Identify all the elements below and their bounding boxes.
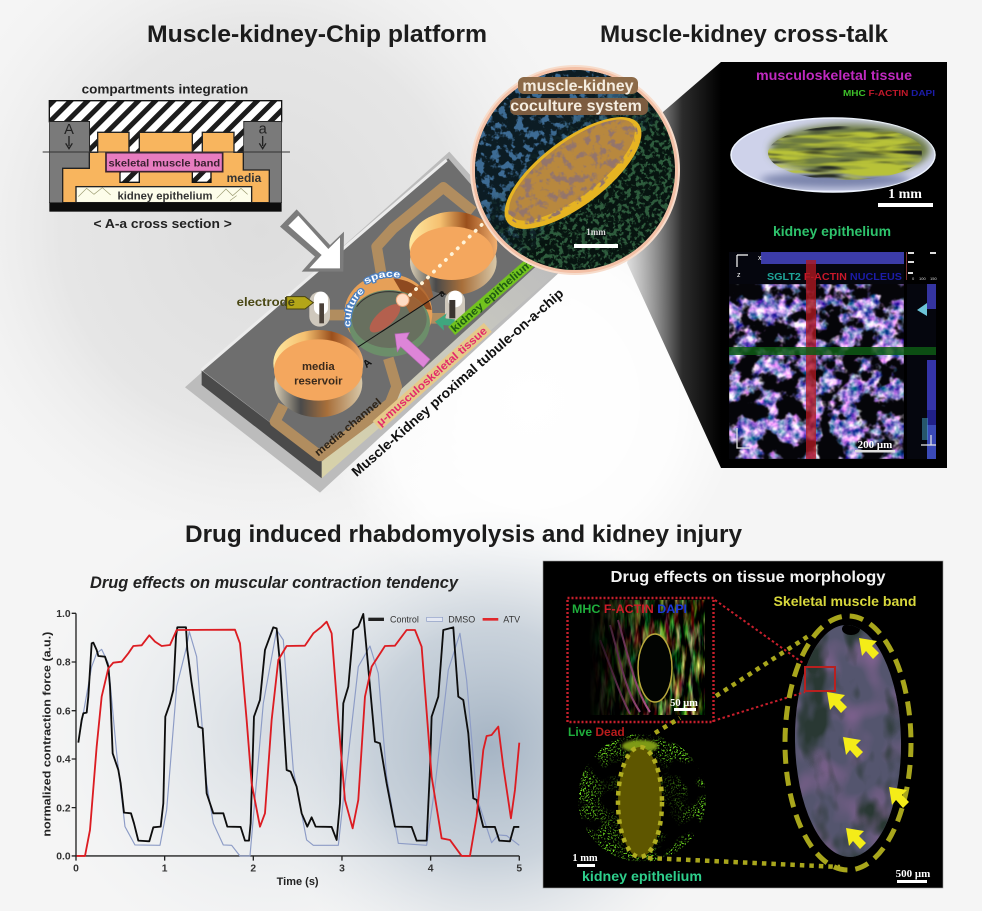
caption: A-a cross section: < A-a cross section >	[93, 217, 232, 231]
small calibration marks: 0	[912, 276, 915, 281]
culture space label: culture	[344, 288, 365, 328]
inset scale bar: 50 μm	[670, 698, 698, 709]
chart legend: DMSO	[448, 614, 475, 624]
scale bar 1 mm	[878, 187, 933, 207]
muscle band image	[731, 118, 935, 192]
scale bar 1 mm: 1 mm	[888, 187, 922, 202]
yellow arrows	[827, 638, 909, 849]
gray side walls	[49, 122, 282, 203]
skeletal muscle band: skeletal muscle band	[108, 158, 220, 169]
y axis title: normalized contraction force (a.u.)	[42, 631, 54, 837]
stain legend: MHC F-ACTIN DAPI	[843, 89, 935, 98]
y tick labels: 0.8	[56, 658, 71, 669]
electrode left	[309, 292, 330, 327]
top orthogonal strip	[729, 252, 904, 284]
top orthogonal strip: z	[737, 272, 741, 279]
red zoom indicators	[568, 598, 835, 722]
series: Control	[78, 614, 519, 841]
panel: musculoskeletal and kidney imaging	[721, 62, 947, 468]
inset micrograph	[589, 600, 705, 715]
chart legend: Control	[390, 614, 419, 624]
label: kidney epithelium: kidney epithelium	[449, 258, 535, 335]
y tick labels	[56, 609, 71, 863]
label: media reservoir: reservoir	[294, 376, 343, 388]
heading: compartments integration: compartments integration	[82, 81, 248, 96]
lower hatched posts	[120, 172, 211, 182]
x tick labels	[73, 863, 522, 874]
label: Muscle-Kidney proximal tubule-on-a-chip: Muscle-Kidney proximal tubule-on-a-chip	[349, 286, 566, 480]
small calibration marks: 150	[930, 276, 937, 281]
skeletal muscle band	[106, 153, 223, 172]
coculture label: muscle-kidney	[522, 78, 634, 95]
horizontal green section band	[729, 347, 936, 355]
live dead legend: Live Dead	[568, 725, 625, 739]
axes	[72, 613, 519, 861]
heading: Drug effects on tissue morphology: Drug effects on tissue morphology	[610, 569, 886, 586]
scale bar 500 μm: 500 μm	[896, 868, 930, 880]
chart legend	[368, 614, 520, 624]
zoom cone shadow	[627, 62, 721, 468]
heading: musculoskeletal tissue: musculoskeletal tissue	[756, 67, 912, 83]
scale bar 1 mm: 1 mm	[572, 853, 598, 864]
title: Muscle-kidney cross-talk: Muscle-kidney cross-talk	[600, 21, 889, 48]
overlay: kidney coculture footprint	[618, 747, 662, 857]
hatched upper compartment	[49, 101, 282, 152]
right media reservoir	[409, 212, 497, 295]
kidney stain legend: SGLT2 F-ACTIN NUCLEUS	[767, 272, 902, 283]
label: media: media	[227, 171, 262, 185]
marker A on chip: A	[361, 356, 375, 371]
electrode callout: electrode	[237, 295, 295, 309]
panel: tissue morphology	[543, 561, 943, 888]
x tick labels: 5	[516, 863, 522, 874]
y tick labels: 0.2	[56, 803, 71, 814]
title: Muscle-kidney-Chip platform: Muscle-kidney-Chip platform	[147, 21, 487, 48]
section marker a: a	[259, 121, 268, 137]
heading: kidney epithelium: kidney epithelium	[773, 223, 891, 239]
label: kidney epithelium: kidney epithelium	[582, 868, 702, 884]
y tick labels: 0.6	[56, 706, 71, 717]
electrode right	[445, 291, 465, 324]
scale bar 200 μm: 200 μm	[858, 439, 892, 451]
label: media channel: media channel	[313, 396, 384, 459]
large white arrow	[280, 209, 344, 272]
muscle tissue petal	[365, 299, 405, 337]
x tick labels: 0	[73, 863, 79, 874]
culture space label	[344, 270, 402, 328]
culture space label: space	[363, 270, 402, 285]
top orthogonal strip: x	[758, 255, 762, 262]
arrow: muscle tissue	[395, 333, 430, 367]
kidney epithelium layer: kidney epithelium	[117, 191, 212, 203]
coculture label	[510, 77, 648, 115]
media channel tubes	[275, 187, 473, 456]
panel: muscle-kidney coculture circle	[470, 65, 680, 275]
small calibration marks	[906, 252, 937, 281]
kidney confocal image	[729, 284, 904, 459]
dashed outline of muscle band	[785, 616, 911, 870]
x axis title: Time (s)	[277, 876, 319, 888]
y tick labels: 0.0	[56, 852, 71, 863]
x tick labels: 3	[339, 863, 345, 874]
vertical red section band	[806, 260, 816, 459]
electrode callout	[237, 295, 313, 309]
chart subtitle: Drug effects on muscular contraction tendency	[90, 574, 459, 592]
label: media reservoir: media	[302, 361, 335, 373]
left media reservoir	[273, 330, 363, 417]
scale bar 1mm: 1mm	[586, 227, 606, 237]
x tick labels: 4	[428, 863, 434, 874]
muscle band fluorescence image	[795, 625, 901, 857]
section marker A	[64, 122, 74, 149]
panel: chip illustration	[185, 152, 566, 492]
inset stain legend: MHC F-ACTIN DAPI	[572, 602, 687, 616]
small calibration marks: 100	[919, 276, 926, 281]
marker a on chip: a	[437, 288, 448, 300]
title: Drug induced rhabdomyolysis and kidney injury: Drug induced rhabdomyolysis and kidney injury	[185, 521, 743, 548]
dotted light path from culture to zoom circle	[403, 222, 485, 313]
A-a section line	[348, 292, 443, 353]
section marker A: A	[64, 122, 74, 138]
series: DMSO	[78, 630, 519, 856]
culture space	[344, 270, 432, 356]
y tick labels: 0.4	[56, 755, 71, 766]
x tick labels: 2	[250, 863, 256, 874]
label: micro musculoskeletal tissue: μ-musculoskeletal tissue	[374, 325, 490, 429]
x tick labels: 1	[162, 863, 168, 874]
tissue in coculture	[504, 117, 642, 229]
chip base plate	[185, 152, 558, 493]
kidney epithelium layer	[76, 187, 252, 203]
kidney live/dead image	[578, 734, 706, 862]
axis marks	[737, 428, 936, 448]
chart legend: ATV	[503, 614, 520, 624]
y tick labels: 1.0	[56, 609, 71, 620]
coculture label: coculture system	[510, 98, 642, 115]
scale bar 1mm	[574, 227, 618, 248]
orange media chamber	[63, 132, 269, 203]
right orthogonal strip	[907, 284, 936, 459]
series: ATV	[77, 622, 519, 856]
heading: Skeletal muscle band: Skeletal muscle band	[774, 593, 916, 609]
focus point	[396, 294, 409, 306]
panel: A-a cross section diagram	[43, 81, 290, 231]
section marker a	[259, 121, 268, 149]
yellow zoom connectors	[648, 635, 840, 867]
arrow: kidney layer	[435, 313, 455, 331]
line chart: contraction force	[42, 609, 522, 888]
